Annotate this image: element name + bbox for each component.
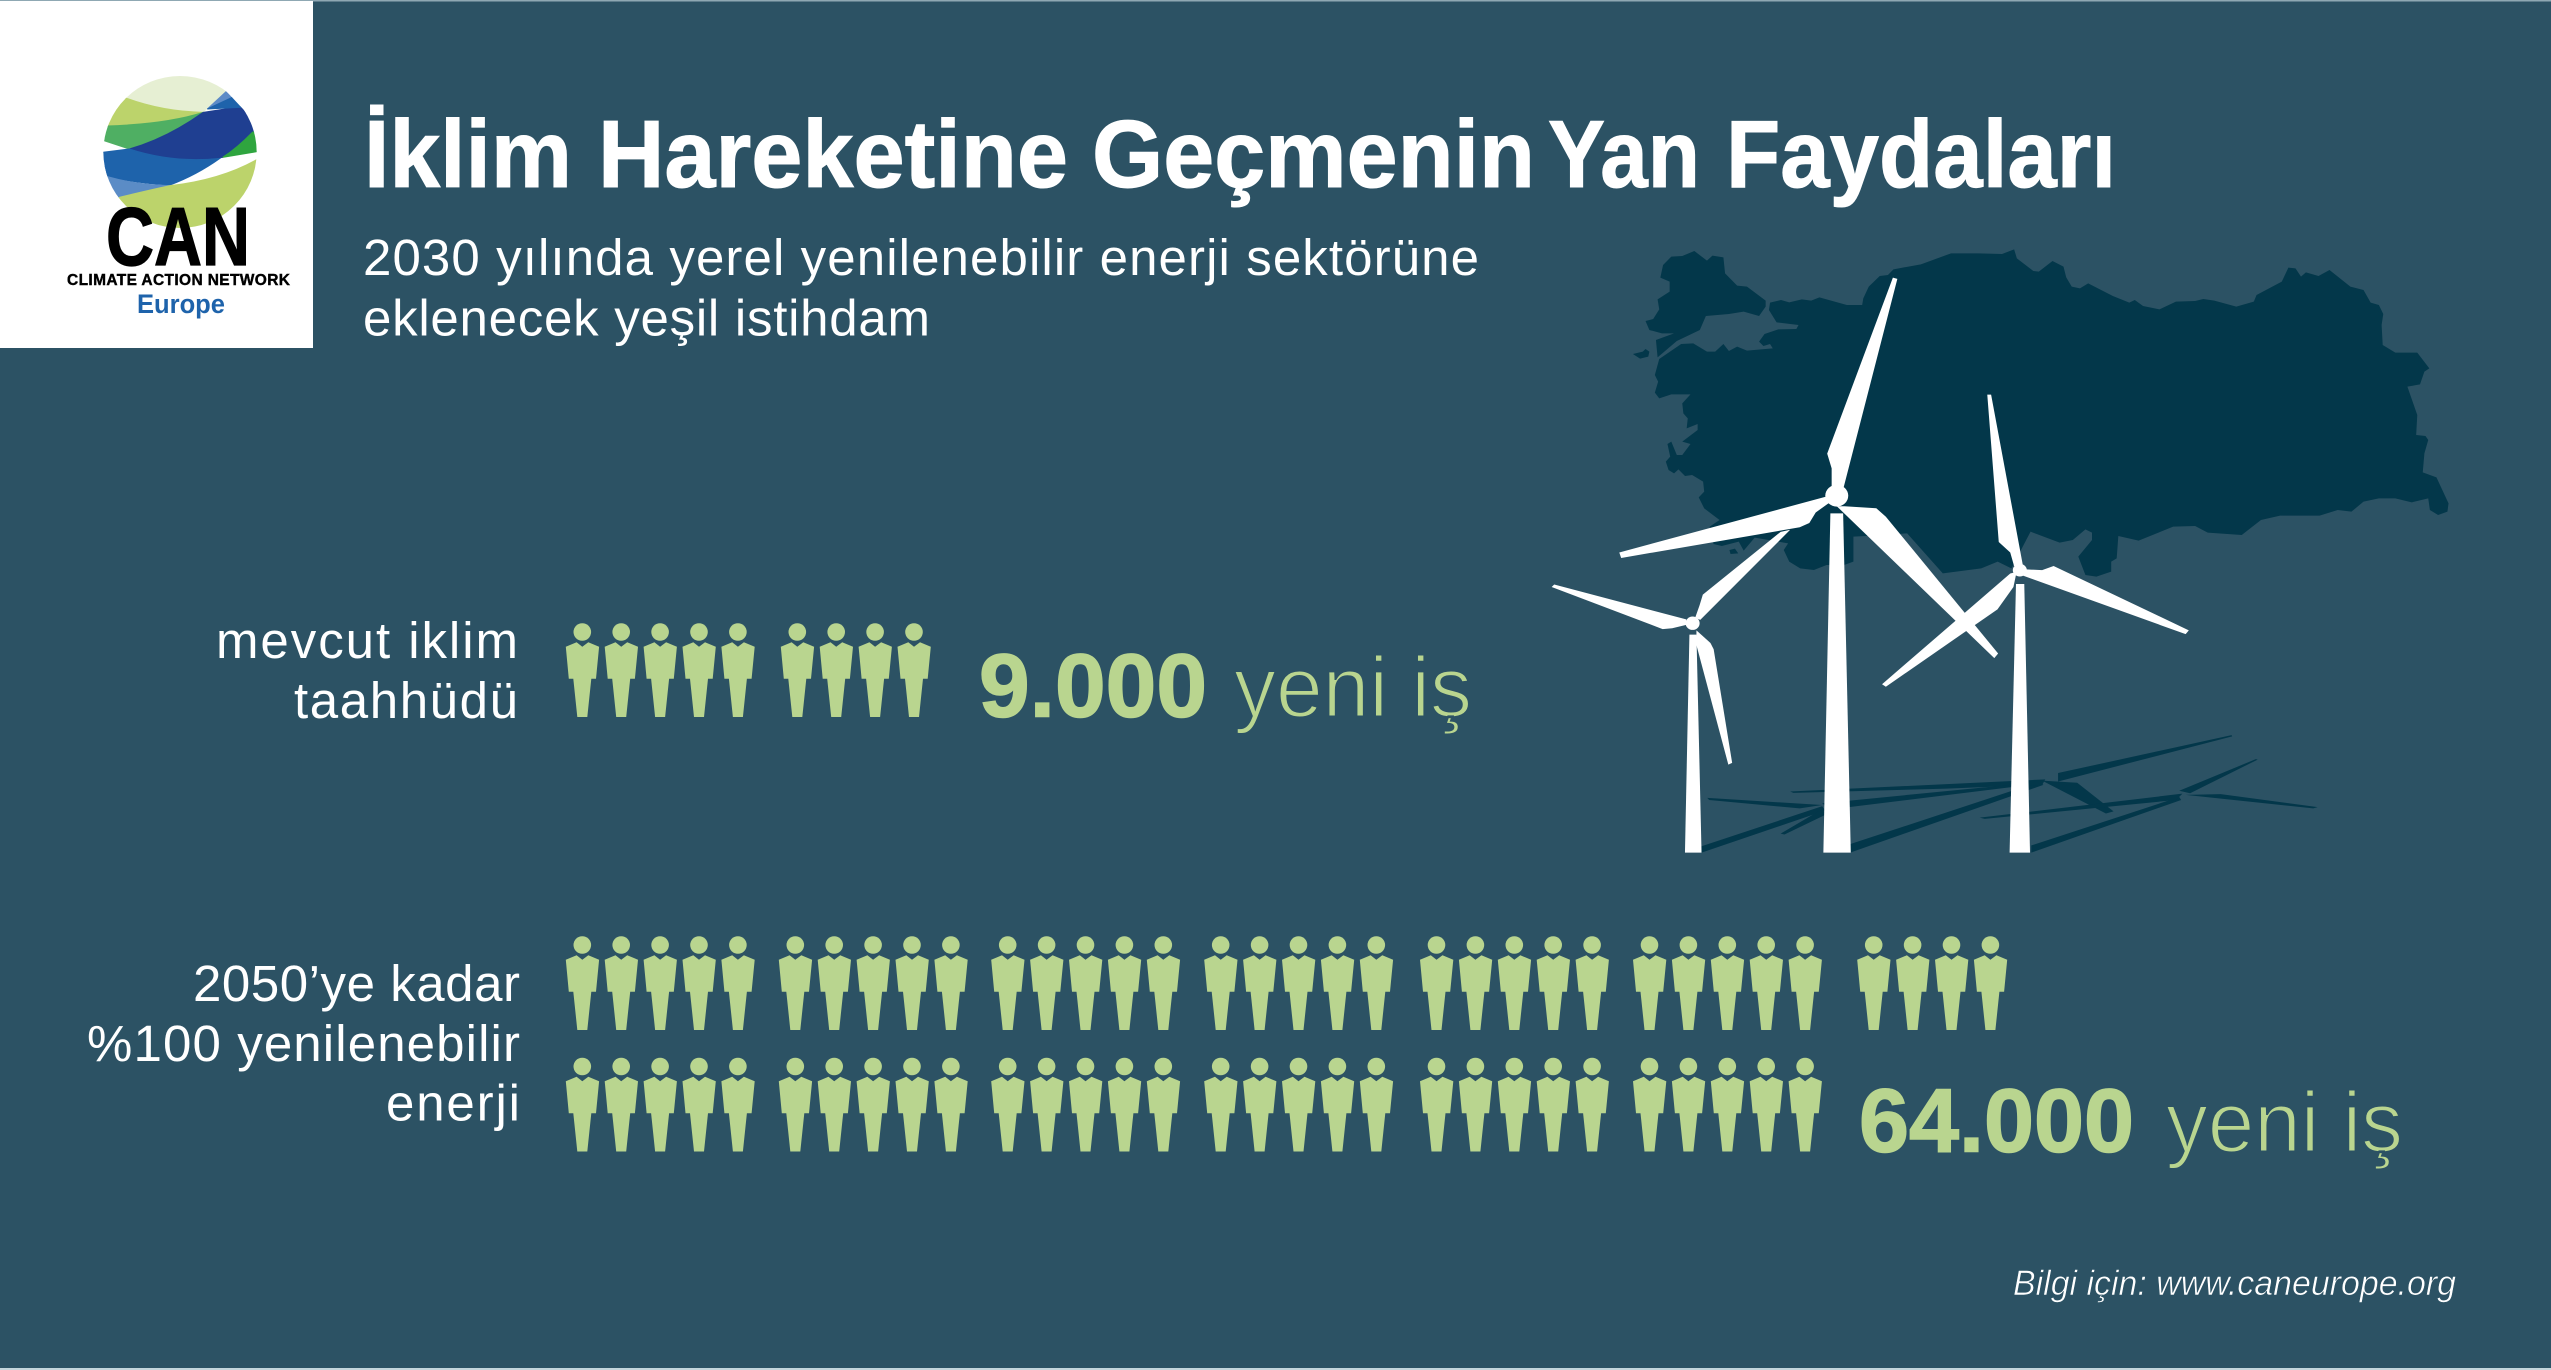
label: current climate commitment: mevcut iklim [216, 612, 518, 669]
logo tagline: CLIMATE ACTION NETWORK [67, 272, 291, 289]
logo wordmark: CAN: CAN [106, 190, 250, 283]
turbine: center [1619, 278, 1998, 853]
label: 100% renewable by 2050 [87, 955, 520, 1132]
wind turbines [1552, 278, 2189, 853]
title: Hareketine [598, 101, 1068, 208]
logo: Climate Action Network Europe [0, 1, 313, 348]
title: Faydaları [1726, 101, 2116, 208]
title: Yan [1548, 101, 1700, 208]
label: current climate commitment [216, 612, 518, 729]
stat: 9.000 yeni iş [979, 636, 1472, 736]
title [364, 101, 2116, 208]
stat: 64.000 yeni iş [1859, 1072, 2403, 1172]
stat: 64.000 yeni iş: yeni iş [2166, 1076, 2403, 1170]
logo region: Europe: Europe [137, 289, 225, 319]
stat: 9.000 yeni iş: yeni iş [1234, 640, 1472, 736]
icon: globe [103, 76, 257, 228]
title: İklim [364, 101, 572, 208]
pictogram row: 9,000 jobs [566, 623, 931, 717]
footer source note: Bilgi için: www.caneurope.org [2013, 1264, 2457, 1303]
label: 100% renewable by 2050: 2050’ye kadar [193, 955, 520, 1012]
pictogram row: 64,000 jobs, lower [566, 1058, 1822, 1152]
pictogram row: 64,000 jobs, upper [566, 936, 2007, 1030]
subtitle: eklenecek yeşil istihdam [363, 290, 930, 346]
stat: 64.000 yeni iş: 64.000 [1859, 1072, 2134, 1172]
subtitle: 2030 yılında yerel yenilenebilir enerji sektörüne [363, 229, 1479, 286]
stat: 9.000 yeni iş: 9.000 [979, 636, 1207, 736]
title: Geçmenin [1092, 101, 1535, 208]
turbine: left [1552, 530, 1790, 853]
label: 100% renewable by 2050: enerji [386, 1074, 520, 1132]
turbine: right [1882, 395, 2189, 853]
wind turbine shadows [1702, 735, 2318, 853]
map: Turkey silhouette [1633, 249, 2449, 577]
label: 100% renewable by 2050: %100 yenilenebilir [87, 1015, 520, 1072]
label: current climate commitment: taahhüdü [294, 672, 518, 729]
subtitle [363, 229, 1479, 346]
